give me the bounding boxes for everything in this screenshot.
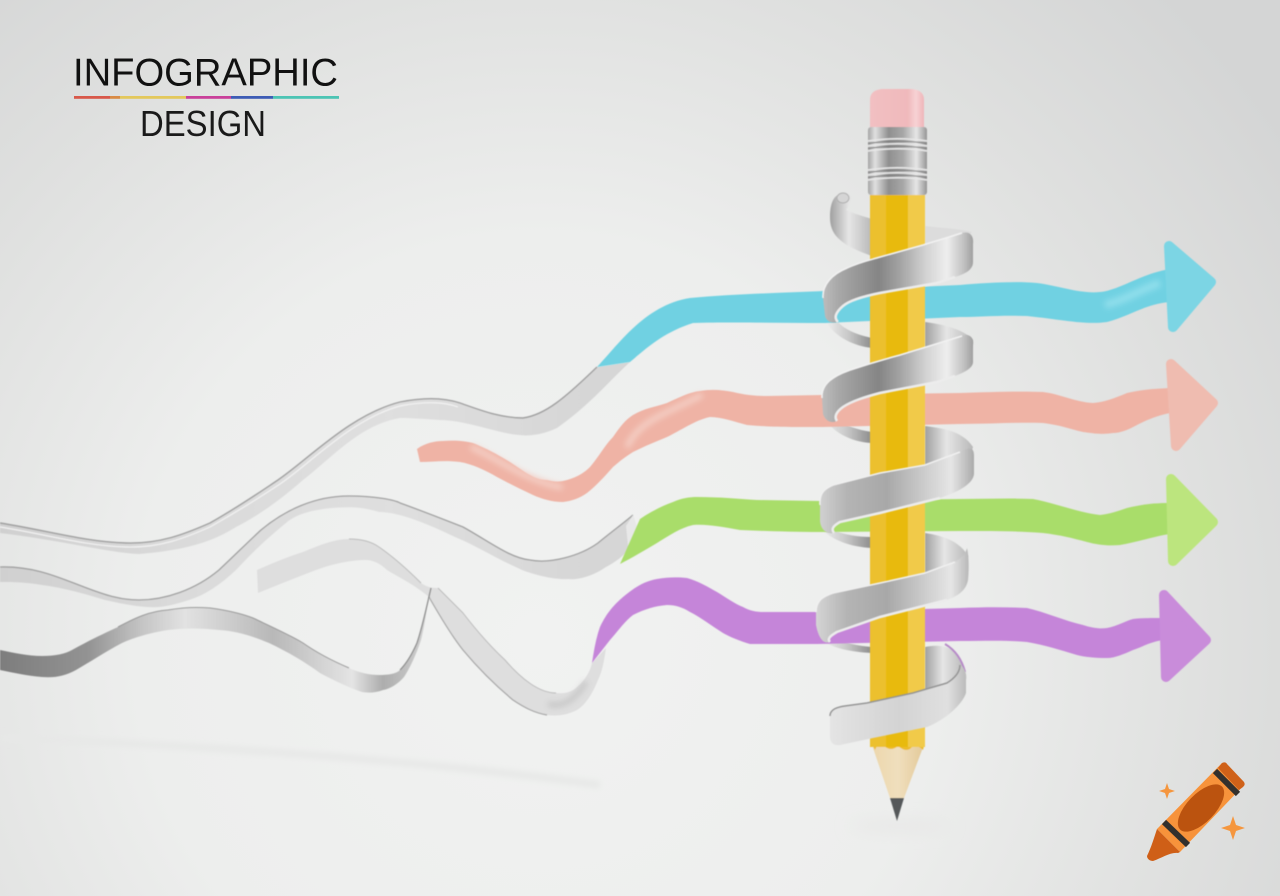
rainbow divider (74, 96, 339, 99)
green arrow (620, 479, 1213, 564)
green band (620, 497, 1170, 564)
pencil body (870, 195, 925, 747)
ferrule (868, 127, 927, 195)
salmon arrow head (1171, 364, 1213, 446)
purple band (592, 577, 1163, 663)
silver ribbon to purple arrow (257, 539, 606, 715)
silver ribbon to blue arrow (0, 362, 630, 554)
purple arrow (592, 577, 1206, 677)
icon: crayon with sparkles (1147, 762, 1245, 861)
pencil tip (871, 742, 925, 821)
sparkle small (1159, 783, 1175, 799)
helix back segments (820, 193, 973, 700)
silver ribbon to green arrow (0, 496, 640, 607)
eraser (870, 89, 924, 127)
salmon arrow (417, 364, 1213, 502)
crayon tip (1147, 829, 1180, 861)
silver ribbon, lower left (0, 588, 431, 693)
blue arrow head (1169, 246, 1211, 327)
crayon cap (1218, 762, 1245, 790)
helix band 1 (823, 233, 973, 323)
blue band (597, 269, 1170, 367)
sparkle large (1221, 816, 1245, 840)
helix band 3 (820, 449, 974, 533)
salmon highlight (473, 396, 700, 487)
crayon body (1157, 763, 1244, 852)
helix band 2 (822, 335, 973, 422)
salmon band (417, 388, 1170, 502)
purple arrow head (1164, 595, 1206, 677)
ground shadows (0, 738, 950, 831)
title: infographic: INFOGRAPHIC (73, 52, 338, 94)
top hook (830, 193, 872, 256)
blue arrow (597, 246, 1211, 367)
pencil (868, 89, 927, 821)
helix band 4 (816, 548, 969, 643)
title (73, 52, 339, 144)
blue highlight (1105, 283, 1160, 305)
crayon stripes (1164, 771, 1238, 845)
crayon label (1170, 777, 1232, 839)
green arrow head (1171, 479, 1213, 561)
helix band 5 (830, 665, 966, 745)
helix front bands (816, 233, 974, 745)
title: design: DESIGN (140, 103, 266, 144)
